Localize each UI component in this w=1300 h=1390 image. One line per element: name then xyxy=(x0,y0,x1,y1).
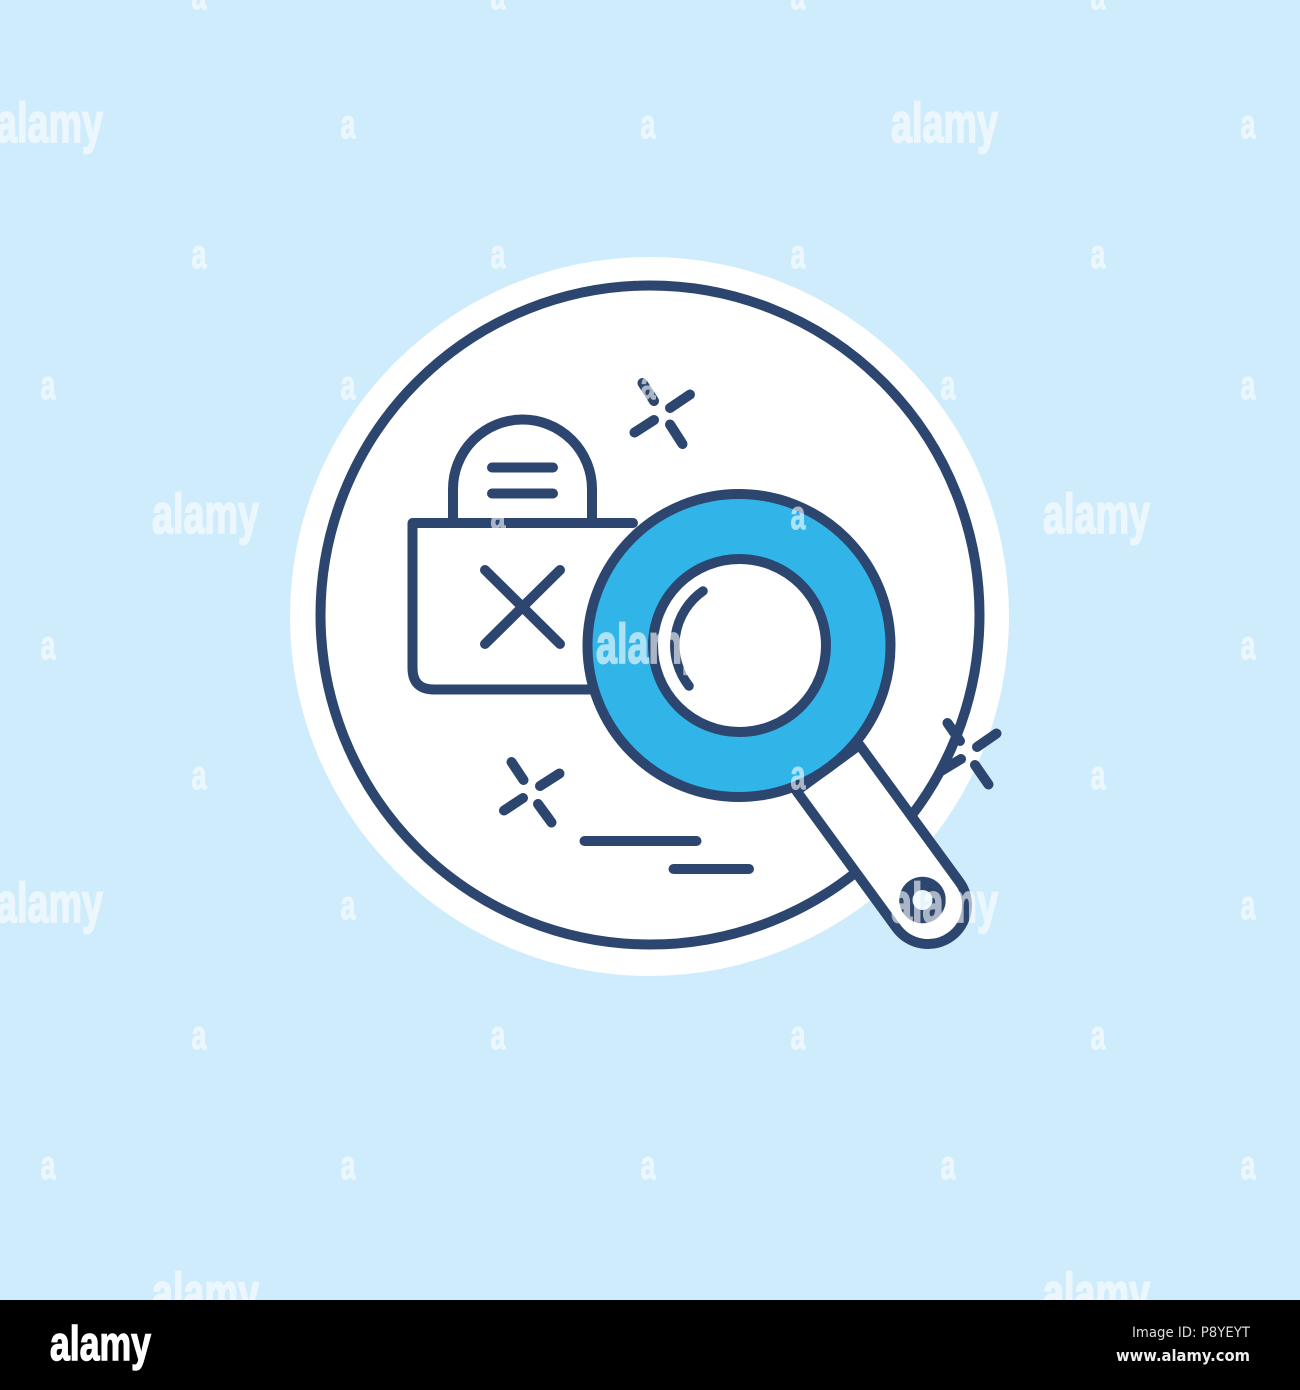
watermarks: alamy xyxy=(891,91,998,154)
small watermarks: a xyxy=(1240,362,1256,408)
white sticker circle xyxy=(290,257,1009,976)
small watermarks: a xyxy=(340,101,356,147)
sparkle right xyxy=(942,723,996,784)
small watermarks: a xyxy=(490,231,506,277)
watermarks: alamy xyxy=(152,482,259,545)
watermarks: alamy xyxy=(152,1261,259,1324)
shackle lines xyxy=(492,468,553,494)
small watermarks: a xyxy=(1240,1142,1256,1188)
image id: Image ID: P8YEYT xyxy=(1132,1325,1250,1341)
glass xyxy=(653,559,826,732)
small watermarks: a xyxy=(1240,622,1256,668)
small watermarks: a xyxy=(640,101,656,147)
small watermarks: a xyxy=(640,362,656,408)
motion lines xyxy=(584,841,749,869)
small watermarks: a xyxy=(490,1012,506,1058)
small watermarks: a xyxy=(1240,101,1256,147)
watermarks: alamy xyxy=(1043,482,1150,545)
small watermarks: a xyxy=(790,492,806,538)
glass highlight xyxy=(675,591,703,686)
padlock body xyxy=(412,523,633,690)
footer bar xyxy=(0,1300,1300,1390)
blue lens ring xyxy=(588,494,890,797)
small watermarks: a xyxy=(1090,752,1106,798)
footer logo: alamy xyxy=(50,1318,151,1371)
small watermarks: a xyxy=(192,752,207,798)
small watermarks: a xyxy=(640,1142,656,1188)
small watermarks: a xyxy=(1090,231,1106,277)
cross mark xyxy=(485,570,560,644)
small watermarks: a xyxy=(940,622,956,668)
small watermarks: a xyxy=(640,882,656,928)
small watermarks: a xyxy=(790,231,806,277)
small watermarks: a xyxy=(1240,882,1256,928)
small watermarks: a xyxy=(1090,1012,1106,1058)
icon: magnifying glass xyxy=(588,494,967,944)
small watermarks: a xyxy=(790,1012,806,1058)
watermarks: alamy xyxy=(0,91,103,154)
watermarks: alamy xyxy=(0,871,103,934)
small watermarks: a xyxy=(490,752,506,798)
navy outline circle xyxy=(320,286,980,944)
small watermarks: a xyxy=(40,622,56,668)
small watermarks: a xyxy=(192,1012,207,1058)
watermarks: alamy xyxy=(891,871,998,934)
sparkle lower left xyxy=(504,762,560,822)
small watermarks: a xyxy=(340,882,356,928)
small watermarks xyxy=(40,0,1256,1188)
padlock shackle xyxy=(453,420,592,523)
small watermarks: a xyxy=(340,1142,356,1188)
watermarks: alamy xyxy=(596,612,703,675)
small watermarks: a xyxy=(40,1142,56,1188)
handle xyxy=(796,745,967,944)
small watermarks: a xyxy=(490,492,506,538)
icon: padlock xyxy=(412,420,633,690)
sparkle top xyxy=(634,383,690,444)
small watermarks: a xyxy=(790,752,806,798)
small watermarks: a xyxy=(40,362,56,408)
watermarks: alamy xyxy=(1043,1261,1150,1324)
small watermarks: a xyxy=(940,1142,956,1188)
small watermarks: a xyxy=(940,362,956,408)
site url: www.alamy.com xyxy=(1116,1346,1250,1365)
small watermarks: a xyxy=(192,231,207,277)
watermarks xyxy=(0,91,1150,1324)
small watermarks: a xyxy=(340,362,356,408)
small watermarks: a xyxy=(340,622,356,668)
